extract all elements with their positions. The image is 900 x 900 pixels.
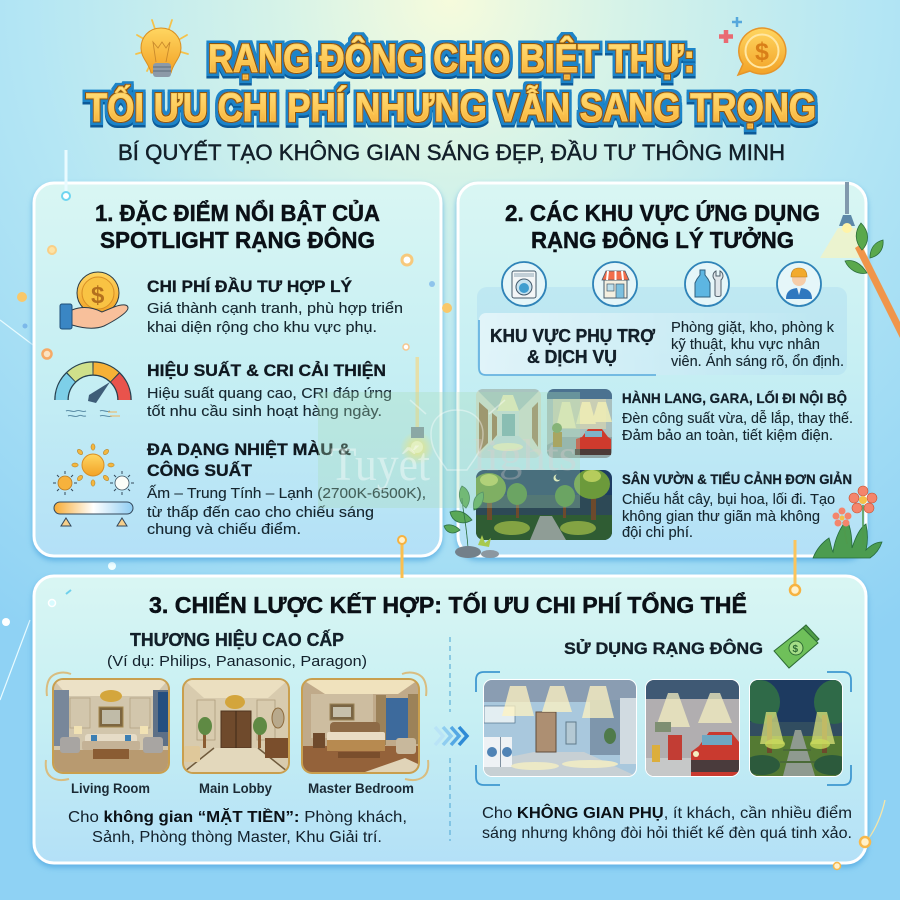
title: TỐI ƯU CHI PHÍ NHƯNG VẪN SANG TRỌNG [86,84,816,130]
heading 1 [95,198,380,253]
photo: garden night [472,469,612,540]
rang dong caption: Cho KHÔNG GIAN PHỤ , ít khách, cần nhiều điểm [482,803,852,822]
heading 2: RẠNG ĐÔNG LÝ TƯỞNG [531,225,794,253]
photo: garage [645,679,740,777]
title [86,35,816,130]
dashed divider [449,637,451,841]
heading 1: 1. ĐẶC ĐIỂM NỔI BẬT CỦA [95,198,380,226]
heading 1: SPOTLIGHT RẠNG ĐÔNG [100,226,375,253]
photo: living room [52,678,170,774]
hanging lamp top right [820,182,868,258]
support areas text [671,319,844,370]
orange branch with leaves [845,223,900,338]
support areas text: Phòng giặt, kho, phòng k [671,319,834,336]
icon: coin speech bubble [719,17,786,75]
item: corridors text [622,389,853,444]
premium brands caption [68,807,407,846]
orange and blue connectors above panels [62,150,870,870]
item: cost: khai diện rộng cho khu vực phụ. [147,319,377,336]
icon: gauge [61,368,125,417]
item: efficiency: tốt nhu cầu sinh hoạt hàng ngày. [147,403,382,420]
support areas sub-panel [477,287,847,375]
photo: garden path [749,679,843,777]
item: efficiency [147,361,392,420]
arrow: chevrons [435,727,467,745]
item: corridors text: Đảm bảo an toàn, tiết kiệm điện. [622,427,833,444]
item: garden text: Chiếu hắt cây, bụi hoa, lối đi. Tạo [622,491,835,508]
panel 2: application areas [458,183,866,556]
premium brands heading: THƯƠNG HIỆU CAO CẤP [130,629,344,650]
item: colour temperature [147,440,426,538]
room labels: Main Lobby [199,781,272,796]
heading 2 [505,199,820,253]
flowers bottom right of panel 2 [813,486,882,558]
premium brands heading [107,629,367,670]
icon: hand holding coin: $ [91,282,105,309]
support areas label: KHU VỰC PHỤ TRỢ [490,325,655,346]
rang dong caption [482,803,852,842]
item: colour temperature: chung và chiếu điểm. [147,521,301,538]
icon: banknotes [774,625,819,668]
item: garden text: SÂN VƯỜN & TIỂU CẢNH ĐƠN GIẢN [622,470,852,487]
bracket frame [476,672,851,785]
heading 2: 2. CÁC KHU VỰC ỨNG DỤNG [505,199,820,226]
title: RẠNG ĐÔNG CHO BIỆT THỰ: [208,35,695,81]
icon: worker [777,262,821,306]
plant with rock bottom left of panel 2 [444,486,499,558]
icon: washing machine [502,262,546,306]
panel 1: characteristics [34,183,452,556]
rang dong heading: SỬ DỤNG RẠNG ĐÔNG [564,639,763,658]
photo: utility hallway [483,679,637,777]
panel 3: combined strategy [34,576,866,863]
watermark [318,392,580,508]
icon: storefront [593,262,637,306]
photo: corridor [476,389,541,458]
item: cost: Giá thành cạnh tranh, phù hợp triển [147,300,403,317]
item: colour temperature: Ấm – Trung Tính – Lạnh (2700K-6500K), [147,485,426,502]
support areas label: & DỊCH VỤ [527,346,617,367]
subtitle: BÍ QUYẾT TẠO KHÔNG GIAN SÁNG ĐẸP, ĐẦU TƯ THÔNG MINH [118,140,785,165]
photo: master bedroom [301,678,420,774]
item: garden text: đội chi phí. [622,524,693,541]
heading 3: 3. CHIẾN LƯỢC KẾT HỢP: TỐI ƯU CHI PHÍ TỔNG THỂ [149,591,747,618]
premium brands caption: Cho không gian “MẶT TIỀN”: Phòng khách, [68,807,407,826]
icon: hand holding coin [60,272,128,329]
room labels: Living Room [71,781,150,796]
premium brands caption: Sảnh, Phòng thòng Master, Khu Giải trí. [92,829,382,846]
support areas text: viên. Ánh sáng rõ, ổn định. [671,353,844,370]
item: cost [147,277,403,336]
premium brands heading: (Ví dụ: Philips, Panasonic, Paragon) [107,653,367,670]
item: corridors text: Đèn công suất vừa, dễ lắp, thay thế. [622,410,853,427]
support areas label [490,325,655,367]
photo: main lobby [182,678,290,774]
item: efficiency: Hiệu suất quang cao, CRI đáp ứng [147,385,392,402]
decorative lines and dots behind panels [0,292,885,866]
watermark: Tuyết [330,438,431,491]
support areas text: kỹ thuật, khu vực nhân [671,336,820,353]
room labels: Master Bedroom [308,781,414,796]
watermark: lights [473,431,577,480]
icon: coin speech bubble: $ [755,38,769,66]
photo: garage [547,389,612,458]
room labels [71,781,414,796]
item: colour temperature: CÔNG SUẤT [147,461,252,480]
icon: banknotes: $ [792,644,798,655]
item: garden text [622,470,852,541]
item: garden text: không gian thư giãn mà không [622,508,820,525]
item: efficiency: HIỆU SUẤT & CRI CẢI THIỆN [147,361,386,380]
icon: cleaning tools [685,262,729,306]
icon: colour temperature suns [53,444,134,526]
gold frame ornaments [46,673,428,780]
panel 3 dots [48,590,71,606]
item: cost: CHI PHÍ ĐẦU TƯ HỢP LÝ [147,277,352,296]
hanging lamp panel 1 [400,357,434,465]
item: colour temperature: ĐA DẠNG NHIỆT MÀU & [147,440,351,459]
rang dong caption: sáng nhưng không đòi hỏi thiết kế đèn quá tinh xảo. [482,825,852,842]
icon: light bulb [136,20,188,77]
panel dots [42,246,452,358]
item: colour temperature: từ thấp đến cao cho chiếu sáng [147,504,374,521]
item: corridors text: HÀNH LANG, GARA, LỐI ĐI NỘI BỘ [622,389,847,406]
